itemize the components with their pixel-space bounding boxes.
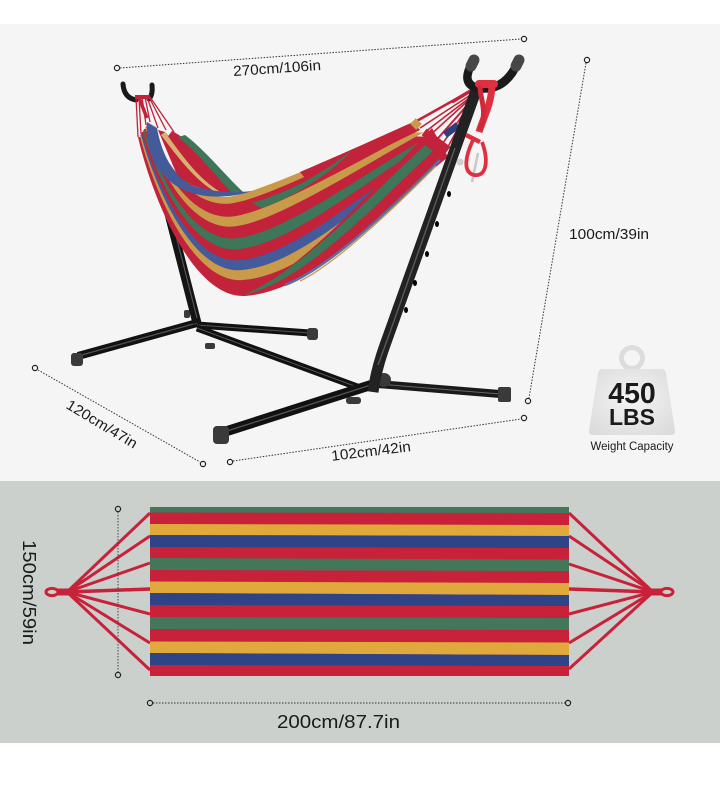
- storage rope and carabiner: [456, 84, 494, 182]
- dimension: height 100cm: 100cm/39in: [569, 227, 649, 243]
- flat hammock: right ropes: [569, 513, 673, 669]
- flat hammock: striped fabric: [150, 507, 569, 676]
- stand: right pole: [373, 88, 477, 392]
- icon: weight: [589, 348, 675, 435]
- dimension: fabric width 150cm: [19, 506, 121, 678]
- weight capacity badge: 450: [608, 378, 656, 410]
- weight capacity badge: LBS: [609, 404, 655, 430]
- panel: stand photo background: [0, 24, 720, 481]
- dimension: length 270cm: 270cm/106in: [233, 58, 322, 80]
- dimension: fabric length 200cm: [147, 700, 571, 732]
- flat hammock: left ropes: [46, 513, 150, 670]
- dimension: depth 120cm: 120cm/47in: [63, 397, 140, 452]
- stand: left hook: [123, 84, 152, 100]
- dimension: fabric width 150cm: 150cm/59in: [19, 540, 40, 645]
- hammock: left cords: [135, 97, 174, 137]
- dimension: length 270cm: [114, 36, 527, 80]
- weight capacity badge: Weight Capacity: [590, 441, 674, 453]
- stand: left pole: [168, 210, 197, 323]
- hammock: right-side stripes: [243, 122, 448, 296]
- dimension: height 100cm: [525, 57, 649, 404]
- stand: right hook: [467, 60, 519, 88]
- stand: near base: [213, 373, 511, 444]
- panel: flat hammock background: [0, 481, 720, 743]
- weight capacity badge: [589, 348, 675, 453]
- stand: far base: [71, 310, 360, 388]
- hammock: right cords: [413, 90, 472, 157]
- hammock: back flap: [147, 122, 252, 197]
- hammock: striped fabric: [138, 122, 448, 296]
- dimension: depth 120cm: [32, 365, 206, 467]
- dimension: fabric length 200cm: 200cm/87.7in: [277, 712, 400, 732]
- dimension: width 102cm: [227, 415, 527, 465]
- dimension: width 102cm: 102cm/42in: [330, 439, 412, 465]
